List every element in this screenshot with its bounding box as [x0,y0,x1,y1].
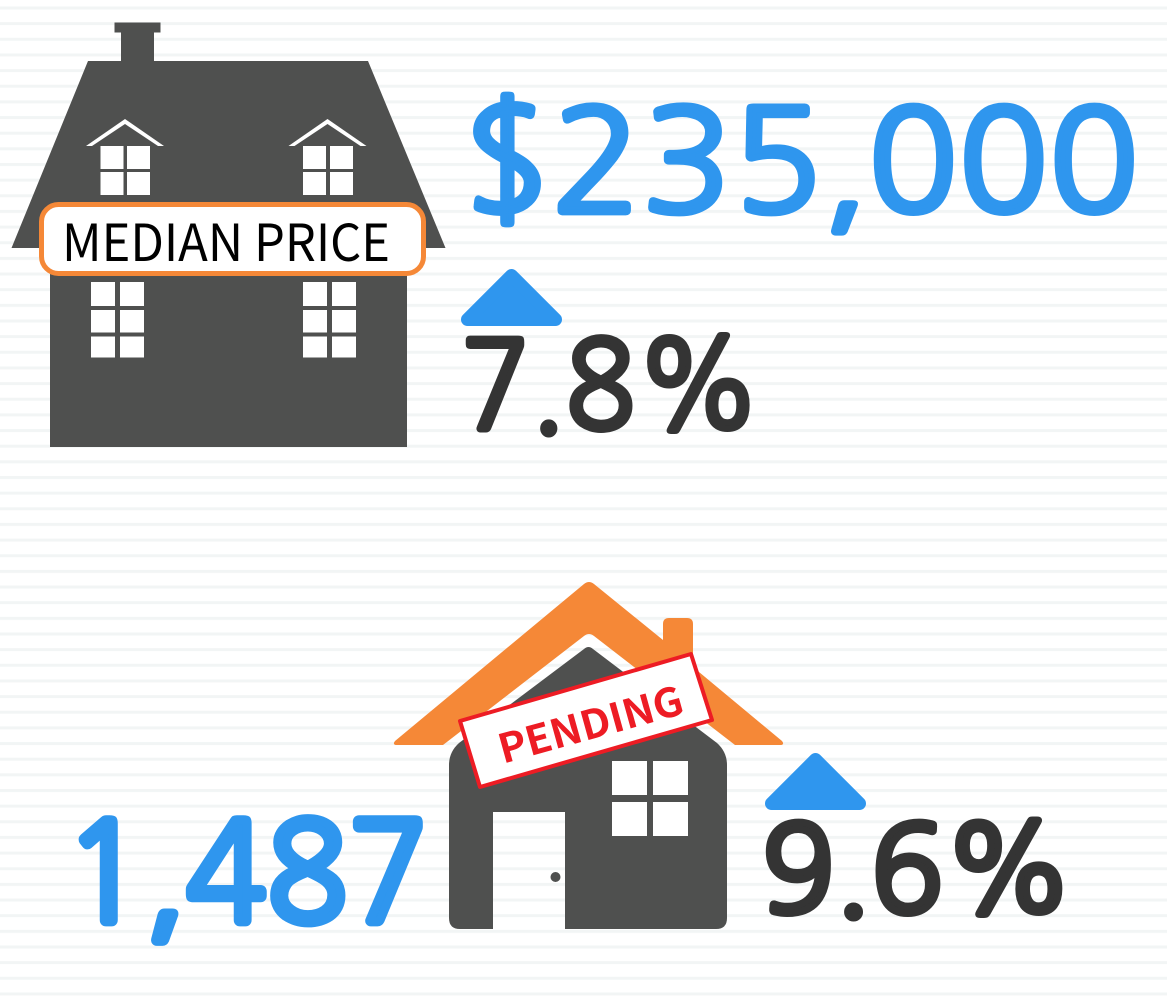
median price label: MEDIAN PRICE [62,202,390,276]
pending sales value: 1,487 [64,804,429,942]
pending sign [460,654,712,787]
median price value: $235,000 [461,91,1139,233]
pending sign: PENDING [491,669,689,775]
icon: pending house [394,582,783,929]
icon: large house with median price label [12,22,446,447]
upper right dormer window [288,119,366,195]
house silhouette [12,22,446,447]
icon: up arrow for median price [468,276,556,320]
window [612,761,688,836]
median price change: 7.8% [460,325,762,447]
icon: up arrow for pending sales [772,760,860,804]
house body with door opening [449,647,727,929]
orange roof with chimney [394,582,783,745]
lower right window [303,282,356,358]
upper left dormer window [86,119,164,195]
door knob [550,872,560,882]
pending sales change: 9.6% [762,810,1074,930]
lower left window [91,282,144,358]
